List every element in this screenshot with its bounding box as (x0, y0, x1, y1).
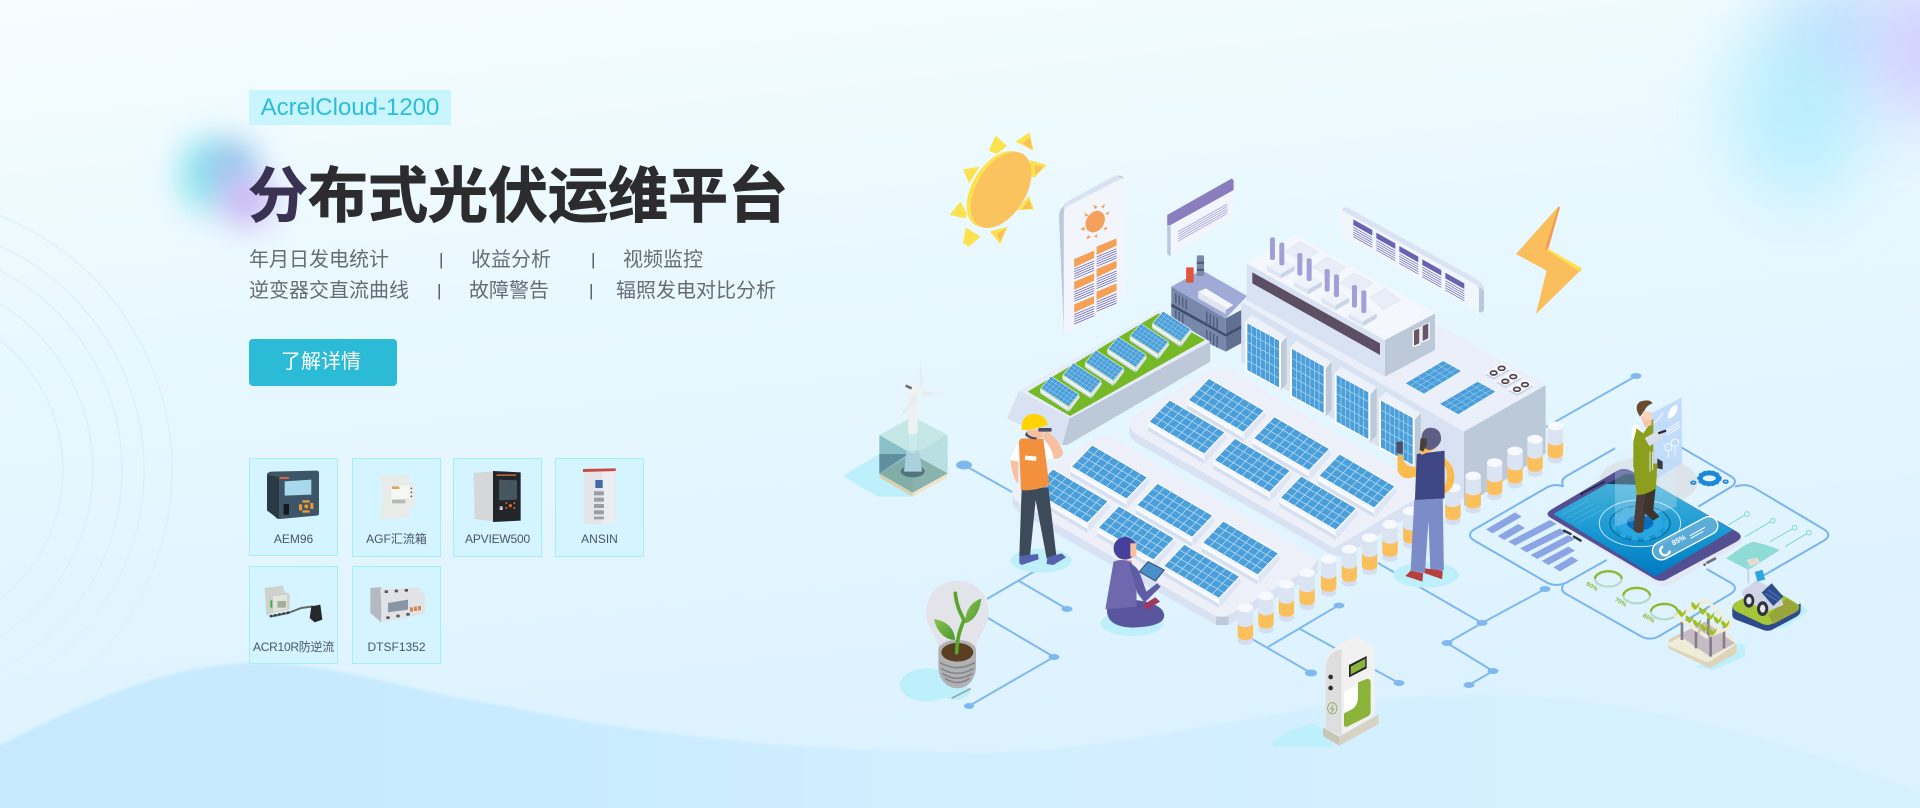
product card: ACR10R: ACR10R防逆流 (253, 640, 334, 654)
product card: DTSF1352: DTSF1352 (367, 640, 426, 654)
wall glass units (1245, 315, 1421, 467)
feature list (249, 249, 776, 302)
product card: AEM96 (249, 458, 338, 556)
progress pill (1649, 513, 1721, 563)
feature list: 年月日发电统计 (249, 249, 389, 271)
building base (1241, 270, 1546, 507)
donut gauges: 80% (1641, 612, 1656, 625)
product card: AGF: AGF汇流箱 (366, 532, 427, 546)
holographic gear (1599, 448, 1681, 547)
product card: APVIEW500: APVIEW500 (465, 532, 530, 546)
icon: wind turbine in water cube (843, 358, 948, 497)
panel outlines (1470, 447, 1828, 639)
concentric rings (0, 196, 172, 744)
product card: DTSF1352 (352, 566, 441, 664)
feature list: 收益分析 (471, 249, 551, 271)
transformer unit (1171, 255, 1247, 352)
inspection robot (1732, 557, 1808, 631)
icon: EV charger (1272, 637, 1379, 747)
button: 了解详情 (281, 351, 361, 373)
product card: ANSIN: ANSIN (581, 532, 618, 546)
bar chart (1486, 512, 1578, 571)
tag: platform code: AcrelCloud-1200 (261, 94, 439, 121)
solar array: front platform (1012, 436, 1318, 625)
smartphone dashboard (1470, 397, 1828, 639)
icon: plant in light bulb (900, 581, 989, 702)
feature list: 逆变器交直流曲线 (249, 280, 409, 302)
feature list: 视频监控 (623, 249, 703, 271)
battery cylinders (1238, 422, 1563, 645)
donut gauges: 60% (1585, 581, 1599, 593)
blurred glow behind title (179, 139, 272, 226)
feature list: | (589, 281, 593, 300)
report panel with sun chart (1059, 175, 1125, 333)
connection lines (956, 373, 1642, 709)
map with pins (1726, 512, 1811, 570)
product card: AEM96: AEM96 (274, 532, 313, 546)
worker with phone (1393, 428, 1459, 588)
feature list: | (439, 250, 443, 269)
roof solar panels and fans (1405, 361, 1534, 415)
floating column list panel (1340, 207, 1484, 312)
icon: gears (1691, 471, 1728, 485)
feature list: | (437, 281, 441, 300)
icon: sun (950, 132, 1047, 247)
roof pipes (1267, 237, 1401, 326)
bottom wave (0, 663, 1920, 808)
title: 分布式光伏运维平台 (248, 163, 788, 230)
upper block (1247, 235, 1435, 377)
product card: ANSIN (555, 458, 644, 557)
donut gauges: 70% (1613, 596, 1628, 609)
tag: platform code (249, 90, 451, 125)
window panel with text lines (1167, 178, 1234, 257)
button (249, 339, 397, 386)
farmer (1631, 400, 1666, 533)
feature list: 故障警告 (469, 280, 549, 302)
feature list: 辐照发电对比分析 (616, 280, 776, 302)
product card: AGF (352, 458, 441, 557)
sitting worker with tablet (1101, 537, 1164, 636)
worker with helmet (1010, 414, 1072, 573)
phone body (1547, 469, 1742, 586)
feature list: | (591, 250, 595, 269)
product card: ACR10R (249, 566, 338, 664)
progress pill: 85% (1670, 532, 1688, 547)
solar array: back platform (1129, 368, 1425, 557)
donut gauges (1585, 571, 1678, 625)
factory building (1241, 235, 1546, 507)
green roof platform with solar panels (1007, 311, 1210, 445)
hydroponic plant stand (1668, 600, 1745, 670)
grey halo (1599, 457, 1698, 507)
blurred glow top right (1728, 0, 1920, 202)
holographic card (1650, 397, 1682, 483)
product card: APVIEW500 (453, 458, 542, 557)
icon: lightning bolt (1516, 207, 1582, 314)
